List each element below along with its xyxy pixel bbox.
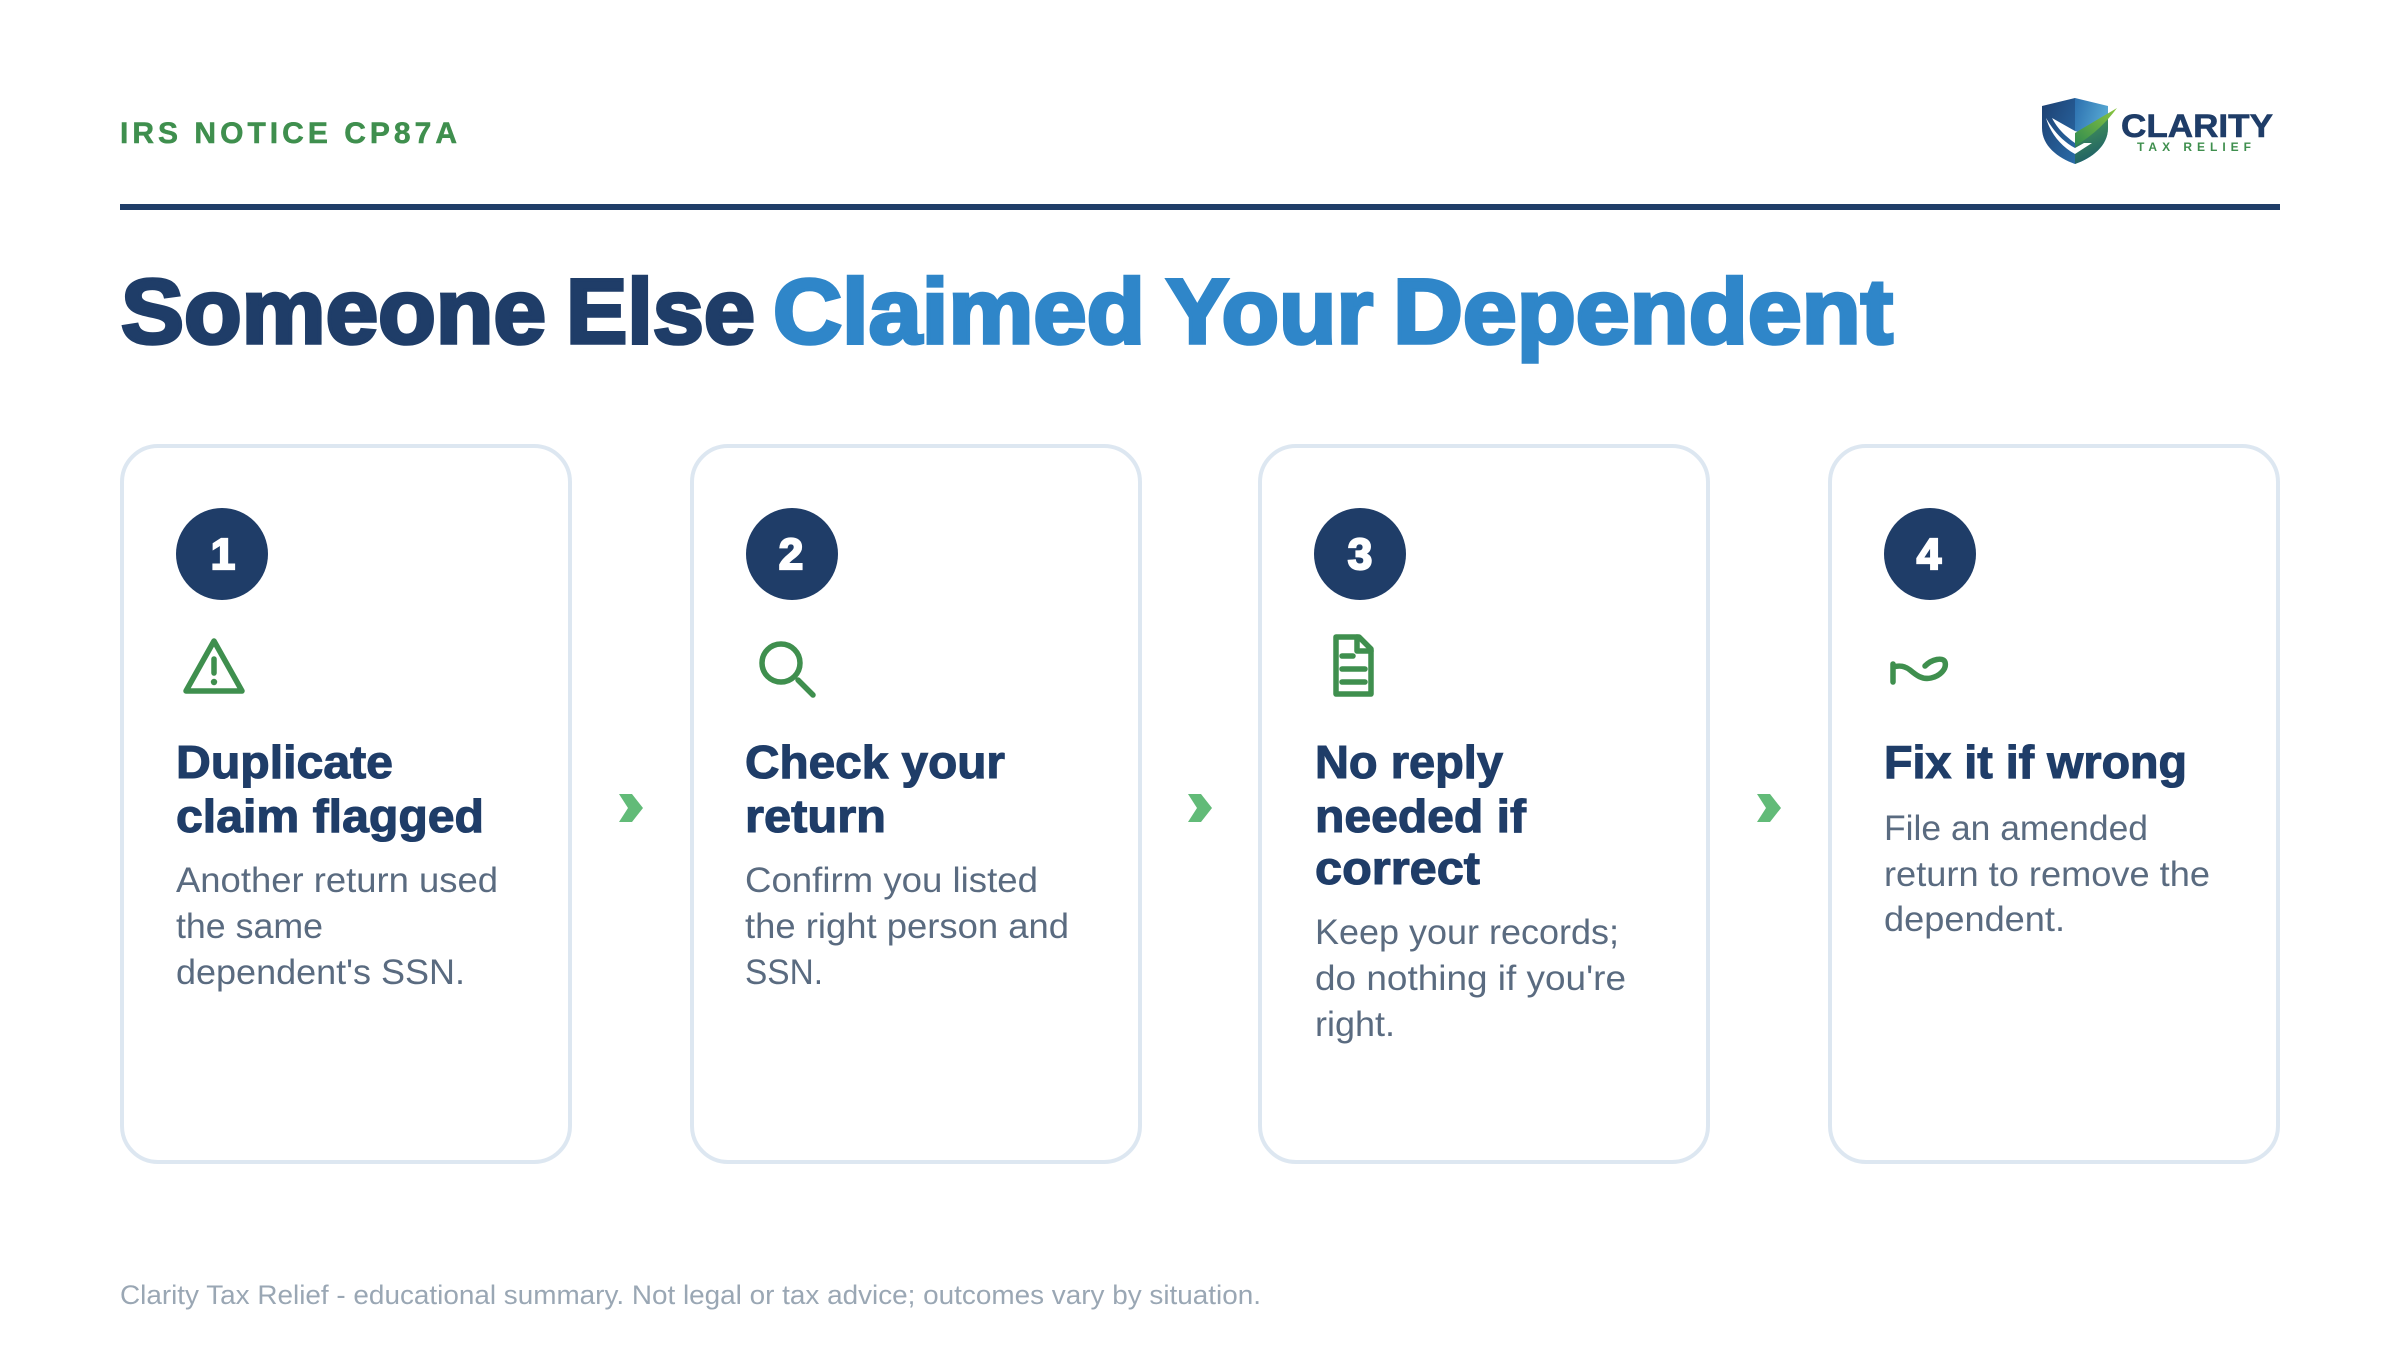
- logo tagline: TAX RELIEF: [2137, 140, 2251, 154]
- number badge 4: 4: [1917, 530, 1942, 579]
- logo: Clarity Tax Relief: [2042, 98, 2273, 164]
- title: [121, 261, 1893, 363]
- number badge 2: 2: [779, 530, 803, 579]
- heading: check your return: [745, 736, 1005, 842]
- body text: Keep your records;: [1315, 913, 1619, 952]
- body text: SSN.: [745, 953, 823, 992]
- body text: right.: [1315, 1005, 1395, 1044]
- panel: step 1: [122, 446, 570, 1162]
- title: Dependent: [1393, 261, 1893, 363]
- heading: duplicate claim flagged: claim flagged: [176, 790, 484, 842]
- number badge 1: [176, 508, 268, 600]
- body text: dependent's SSN.: [176, 953, 465, 992]
- body text: do nothing if you're: [1315, 959, 1626, 998]
- body text: Confirm you listed: [745, 861, 1038, 900]
- footer disclaimer: Clarity Tax Relief - educational summary. Not legal or tax advice; outcomes vary by situation.: [120, 1280, 1261, 1310]
- number badge 4: [1884, 508, 1976, 600]
- panel: step 4: [1830, 446, 2278, 1162]
- icon: document: [1336, 637, 1371, 694]
- title: Your: [1166, 261, 1373, 363]
- title: Claimed: [773, 261, 1145, 363]
- body text: dependent.: [1884, 900, 2065, 939]
- body text: [745, 861, 1069, 992]
- number badge 1: 1: [211, 530, 235, 579]
- arrow 1 to 2: [619, 794, 643, 822]
- heading: check your return: Check your: [745, 736, 1005, 788]
- heading: check your return: return: [745, 790, 886, 842]
- icon: warning triangle: [186, 641, 242, 691]
- body text: the right person and: [745, 907, 1069, 946]
- heading: fix it if wrong: Fix it if wrong: [1884, 736, 2187, 788]
- shield mark: [2042, 98, 2117, 164]
- body text: [1884, 809, 2210, 939]
- body text: [176, 861, 498, 992]
- body text: [1315, 913, 1626, 1044]
- icon: signature squiggle: [1893, 659, 1945, 682]
- heading: no reply needed if correct: correct: [1315, 842, 1480, 894]
- heading: no reply needed if correct: needed if: [1315, 790, 1527, 842]
- body text: File an amended: [1884, 809, 2148, 848]
- title: Else: [566, 261, 755, 363]
- icon: magnifying glass: [762, 644, 813, 695]
- logo wordmark: CLARITY: [2121, 108, 2273, 144]
- eyebrow label: IRS NOTICE CP87A: [120, 117, 457, 150]
- heading: no reply needed if correct: No reply: [1315, 736, 1503, 788]
- panel: step 2: [692, 446, 1140, 1162]
- arrow 3 to 4: [1757, 794, 1781, 822]
- heading: duplicate claim flagged: Duplicate: [176, 736, 393, 788]
- body text: Another return used: [176, 861, 498, 900]
- title: Someone: [121, 261, 546, 363]
- number badge 3: 3: [1348, 530, 1372, 579]
- number badge 2: [746, 508, 838, 600]
- heading: no reply needed if correct: [1315, 736, 1527, 894]
- body text: return to remove the: [1884, 855, 2210, 894]
- panel: step 3: [1260, 446, 1708, 1162]
- arrow 2 to 3: [1188, 794, 1212, 822]
- number badge 3: [1314, 508, 1406, 600]
- heading: duplicate claim flagged: [176, 736, 484, 842]
- body text: the same: [176, 907, 323, 946]
